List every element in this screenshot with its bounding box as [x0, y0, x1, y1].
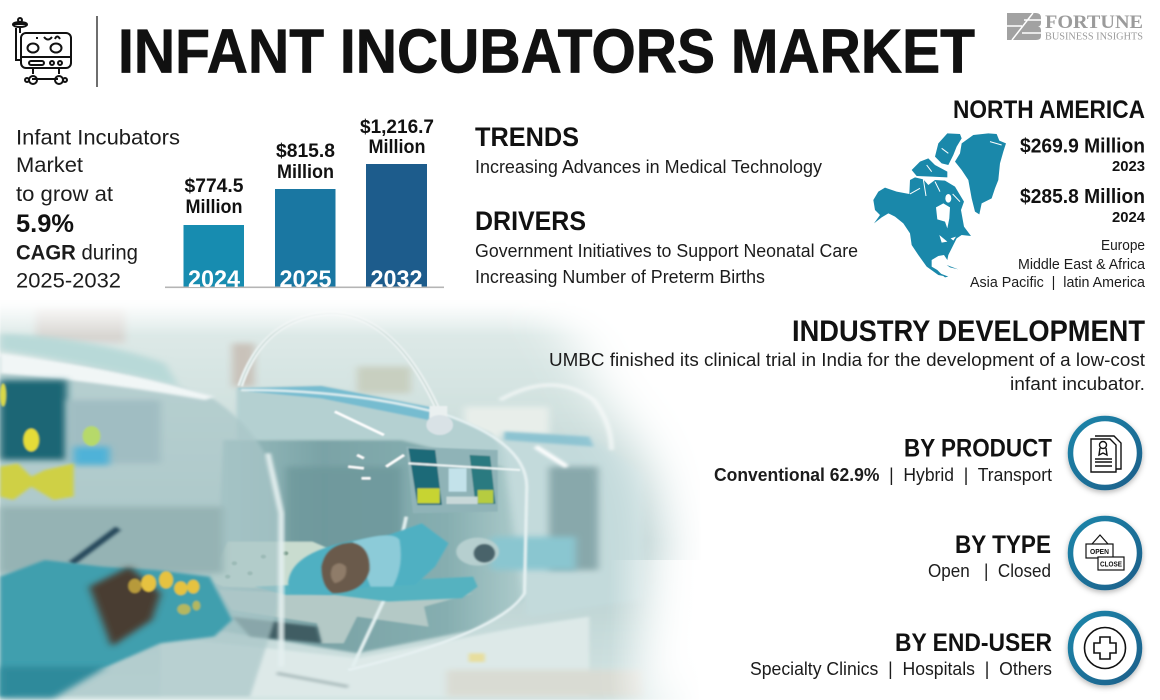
panel: by product	[714, 434, 1052, 485]
logo: Fortune Business Insights: BUSINESS INSIGHTS	[1045, 32, 1143, 42]
text: CAGR summary: Infant Incubators	[16, 126, 180, 150]
title: INFANT INCUBATORS MARKET	[118, 18, 975, 86]
panel: North America values: 2023	[1112, 159, 1145, 175]
bar chart: market size	[165, 116, 444, 293]
top fade to white	[0, 298, 710, 336]
panel: North America values: NORTH AMERICA	[953, 96, 1145, 124]
panel: by end-user	[750, 629, 1052, 679]
icon: by type open close sign: CLOSE	[1100, 560, 1122, 568]
panel: trends: Increasing Advances in Medical Technology	[475, 157, 822, 177]
text: CAGR summary: Market	[16, 154, 83, 177]
panel: by product: BY PRODUCT	[904, 434, 1052, 462]
bottom-right fade edge	[610, 560, 702, 700]
bar chart: market size: $774.5	[184, 175, 244, 197]
panel: by product: Conventional 62.9% | Hybrid | Transport	[714, 465, 1052, 485]
monitor panel	[406, 447, 498, 513]
logo: Fortune Business Insights: FORTUNE	[1045, 12, 1143, 33]
divider beside title	[96, 16, 98, 87]
panel: by type: Open | Closed	[928, 561, 1051, 581]
panel: North America values: 2024	[1112, 210, 1145, 226]
icon: by end-user medical cross	[1070, 614, 1140, 682]
icon: by type open close sign	[1070, 518, 1140, 588]
panel: drivers: DRIVERS	[475, 206, 586, 236]
lid	[237, 386, 431, 420]
bar chart: market size: 2032	[370, 266, 422, 293]
logo: Fortune Business Insights	[1007, 12, 1143, 42]
panel: by type: BY TYPE	[955, 531, 1051, 559]
port	[456, 538, 499, 566]
bar chart: market size: $1,216.7	[360, 116, 434, 138]
panel: North America values: Middle East & Africa	[1018, 257, 1146, 273]
panel: North America values: $269.9 Million	[1020, 136, 1145, 158]
panel: drivers: Increasing Number of Preterm Births	[475, 267, 765, 287]
panel: drivers	[475, 206, 858, 287]
right background incubator	[500, 433, 643, 617]
right fade to white	[510, 250, 1150, 699]
foreground blurred incubator	[0, 357, 281, 697]
panel: drivers: Government Initiatives to Support Neonatal Care	[475, 241, 858, 261]
bar chart: market size: 2025	[280, 266, 332, 293]
text: CAGR summary	[16, 126, 180, 292]
base of incubator	[161, 617, 589, 697]
panel: industry development	[549, 315, 1145, 394]
map: North America	[873, 133, 1006, 277]
panel: by end-user: Specialty Clinics | Hospitals | Others	[750, 659, 1052, 679]
panel: by type	[928, 531, 1051, 581]
panel: trends	[475, 122, 822, 177]
incubator upper glass	[237, 386, 522, 470]
hood outline	[241, 390, 527, 670]
panel: industry development: infant incubator.	[1010, 374, 1145, 394]
bar chart: market size: Million	[186, 196, 242, 218]
photo: newborn in incubator	[0, 250, 1150, 700]
text: CAGR summary: 2025-2032	[16, 270, 121, 292]
bar chart: market size: 2024	[188, 266, 241, 293]
panel: North America values: $285.8 Million	[1020, 186, 1145, 208]
bar chart: market size: $815.8	[276, 140, 335, 162]
incubator interior	[214, 440, 525, 653]
text: CAGR summary: CAGR during	[16, 242, 138, 264]
text: CAGR summary: to grow at	[16, 183, 113, 206]
panel: industry development: UMBC finished its clinical trial in India for the development of a low-cost	[549, 350, 1145, 370]
icon: by product certificate	[1070, 418, 1140, 488]
baby	[209, 542, 339, 590]
tube arch	[240, 313, 437, 407]
panel: by end-user: BY END-USER	[895, 629, 1052, 657]
tray	[219, 590, 473, 643]
panel: trends: TRENDS	[475, 122, 579, 152]
text: CAGR summary: 5.9%	[16, 210, 74, 238]
panel: North America values: Asia Pacific | latin America	[970, 275, 1146, 291]
bar chart: market size: Million	[277, 161, 334, 183]
panel: North America values: Europe	[1101, 238, 1145, 254]
icon: incubator line icon	[13, 18, 71, 84]
icon: by type open close sign: OPEN	[1090, 547, 1109, 556]
panel: North America values	[953, 96, 1146, 291]
bar chart: market size: Million	[368, 136, 426, 158]
